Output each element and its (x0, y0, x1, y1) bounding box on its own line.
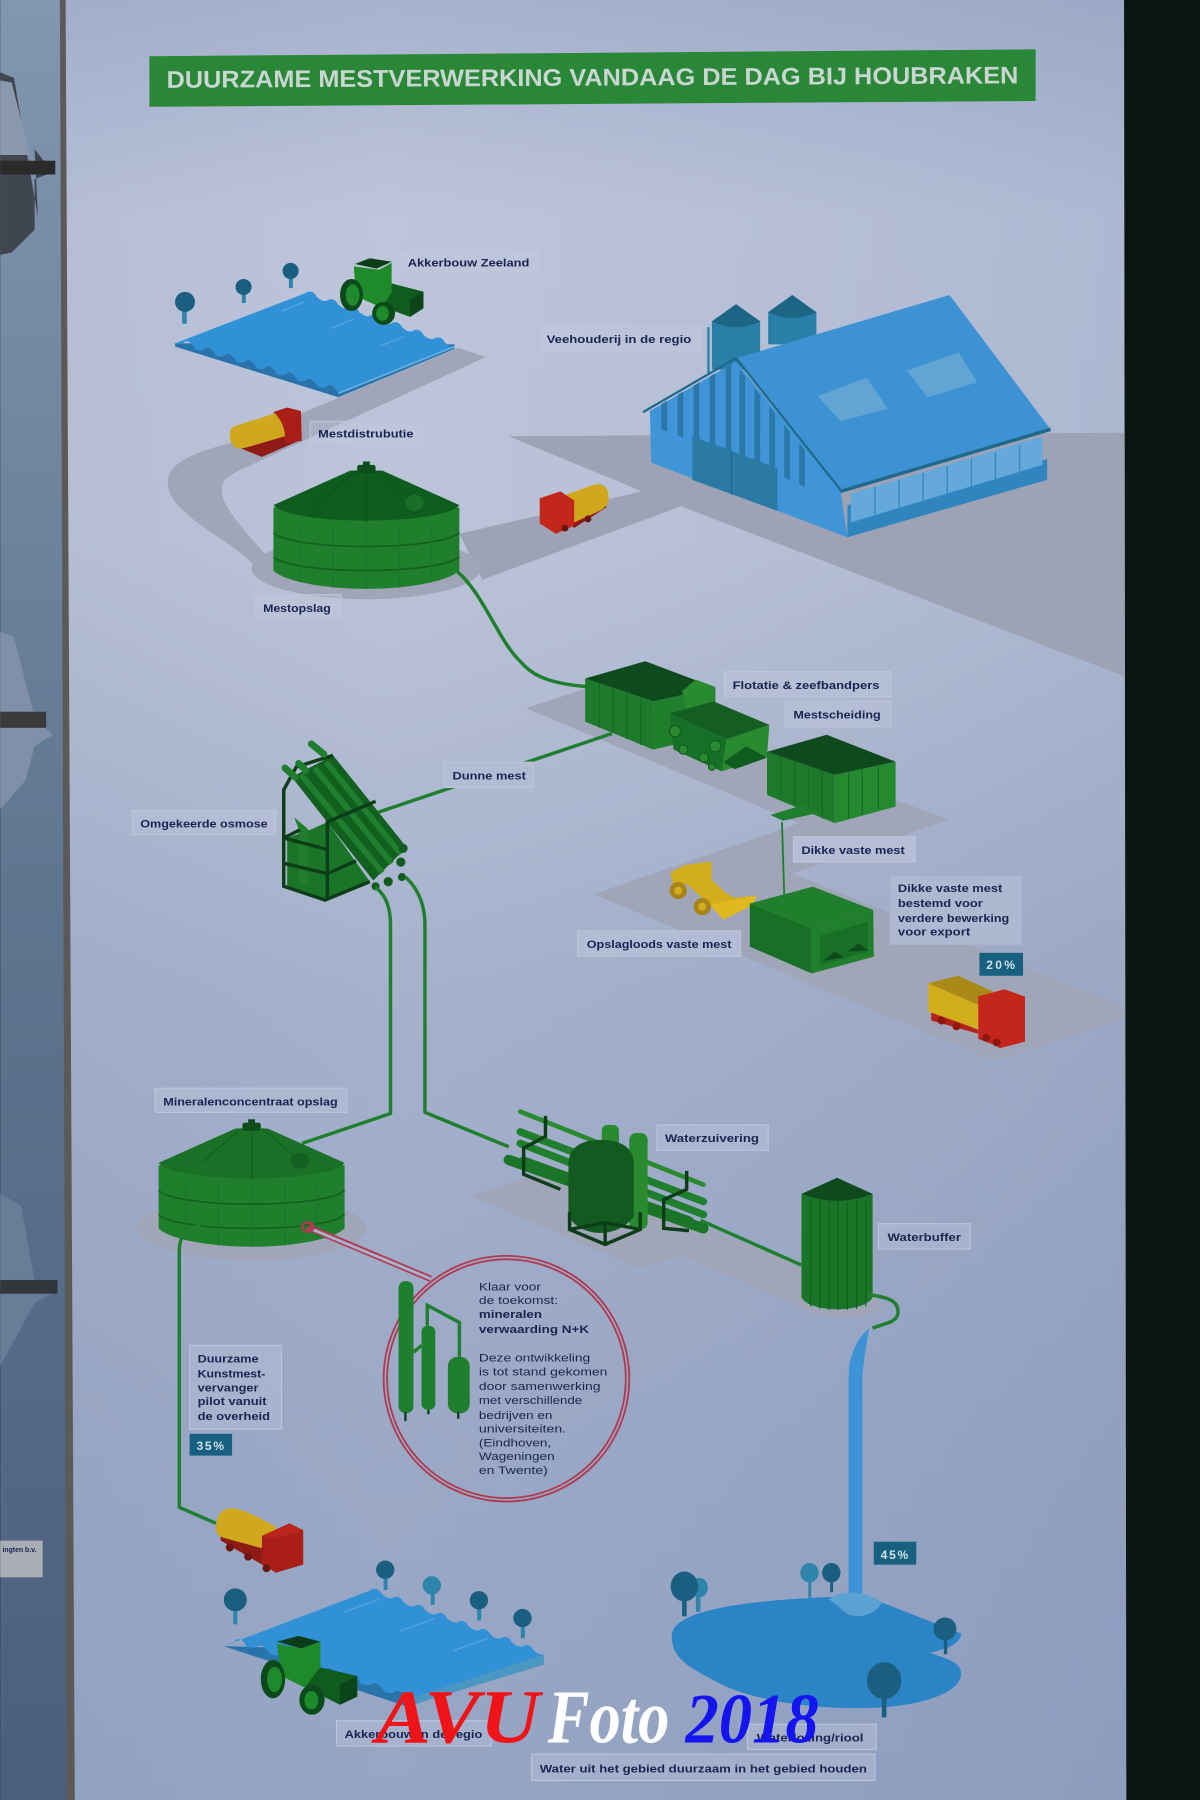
trees: pond (671, 1563, 956, 1717)
callout: minerals circle: Klaar voor (479, 1281, 541, 1293)
callout: minerals circle (384, 1256, 629, 1502)
trees: Zeeland (175, 263, 299, 324)
label: Dunne mest: Dunne mest (452, 770, 526, 782)
text: Duurzame Kunstmest-vervanger: Duurzame (198, 1354, 258, 1366)
pipe: purification to buffer (700, 1220, 801, 1265)
watermark: AVU Foto 2018 (371, 1676, 819, 1760)
text: export note: verdere bewerking (898, 913, 1009, 925)
pipe: buffer outlet (869, 1295, 898, 1328)
label: Water uit het gebied: Water uit het gebied duurzaam in het gebied houden (540, 1763, 867, 1775)
trees: regional field (224, 1561, 532, 1638)
icon: farm building (643, 295, 1051, 537)
icon: fertilizer tanker (216, 1508, 303, 1573)
label: Mestscheiding: Mestscheiding (793, 710, 881, 722)
label: Mestopslag: Mestopslag (263, 603, 331, 615)
watermark: AVU Foto 2018: AVU (371, 1676, 543, 1760)
title banner (149, 49, 1036, 107)
text: Duurzame Kunstmest-vervanger: vervanger (198, 1382, 259, 1394)
label: Mestdistrubutie: Mestdistrubutie (318, 428, 413, 440)
pipes: osmosis outputs (302, 877, 509, 1147)
pipe: tank to separator (456, 571, 586, 686)
small sign on frame (0, 1541, 43, 1577)
icon: tractor top (340, 258, 423, 325)
callout: minerals circle: Wageningen (479, 1451, 555, 1463)
icon: solids container (767, 735, 896, 823)
badge: 45%: 45% (881, 1548, 909, 1562)
label: Water uit het gebied (532, 1754, 875, 1780)
icon: storage tank Mestopslag (273, 461, 459, 589)
text: Duurzame Kunstmest-vervanger: pilot vanuit (198, 1396, 267, 1408)
icon: water buffer tower (801, 1178, 873, 1310)
callout: minerals circle: met verschillende (479, 1395, 582, 1407)
callout: minerals circle: universiteiten. (479, 1424, 566, 1436)
label: Mineralenconcentraat opslag (155, 1088, 347, 1112)
icon: yellow loader (670, 862, 757, 920)
pipe: tank to fertilizer tanker (179, 1225, 216, 1523)
icon: water purification (509, 1112, 703, 1244)
label: Waterbuffer (878, 1224, 970, 1249)
callout: minerals circle: bedrijven en (479, 1410, 552, 1422)
label: Akkerbouw in de regio (337, 1721, 492, 1746)
label: Dikke vaste mest: Dikke vaste mest (801, 845, 905, 857)
label: Veehouderij in de regio: Veehouderij in de regio (547, 334, 692, 346)
label: Waterzuivering (657, 1125, 768, 1150)
text: export note: voor export (898, 927, 971, 939)
text: export note: Dikke vaste mest (898, 883, 1003, 895)
icon: flotation container (585, 661, 715, 750)
watermark: AVU Foto 2018: Foto (547, 1676, 669, 1760)
icon: solid manure shed (750, 887, 874, 973)
callout: minerals circle: verwaarding N+K (479, 1324, 589, 1336)
title banner: DUURZAME MESTVERWERKING VANDAAG DE DAG BIJ HOUBRAKEN (167, 62, 1018, 94)
badge: 20% (979, 953, 1023, 976)
text: export note (890, 876, 1022, 945)
label: Opslagloods vaste mest: Opslagloods vaste mest (587, 939, 732, 951)
label: Flotatie & zeefbandpers: Flotatie & zeefbandpers (733, 680, 880, 692)
icon: reverse osmosis rack (284, 744, 408, 900)
background: left metal frame (0, 0, 76, 1800)
badge: 35% (190, 1434, 232, 1456)
callout: minerals circle: de toekomst: (479, 1295, 558, 1307)
label: Mineralenconcentraat opslag: Mineralenconcentraat opslag (163, 1096, 338, 1108)
label: Opslagloods vaste mest (578, 931, 741, 956)
road and ground shadows (137, 348, 1124, 1317)
label: Omgekeerde osmose (132, 810, 276, 835)
label: Akkerbouw Zeeland (400, 250, 539, 273)
water stream (849, 1328, 869, 1601)
label: Waterlozing/riool (748, 1724, 876, 1749)
watermark: AVU Foto 2018: 2018 (685, 1681, 819, 1759)
icon: tanker distribution (230, 408, 302, 457)
pipe: thin fraction to osmosis (373, 734, 612, 814)
label: Veehouderij in de regio (539, 326, 702, 351)
small sign on frame: ingten b.v. (2, 1547, 36, 1554)
pipe: solids to shed (782, 822, 784, 895)
badge: 20%: 20% (986, 958, 1015, 972)
icon: mineral concentrate tank (159, 1119, 345, 1247)
badge: 35%: 35% (196, 1439, 224, 1453)
label: Mestscheiding (785, 701, 891, 727)
callout: minerals circle: door samenwerking (479, 1381, 601, 1393)
text: Duurzame Kunstmest-vervanger: de overheid (198, 1411, 270, 1423)
label: Flotatie & zeefbandpers (725, 672, 891, 697)
field: Akkerbouw Zeeland (175, 292, 455, 397)
icon: distillation columns (399, 1281, 470, 1421)
callout: minerals circle: is tot stand gekomen (479, 1366, 607, 1378)
callout: minerals circle: en Twente) (479, 1465, 548, 1477)
label: Dikke vaste mest (793, 837, 915, 862)
icon: export truck (928, 976, 1025, 1048)
callout: minerals circle: Deze ontwikkeling (479, 1352, 590, 1364)
label: Waterlozing/riool: Waterlozing/riool (757, 1732, 863, 1744)
icon: tractor bottom (261, 1636, 357, 1715)
text: Duurzame Kunstmest-vervanger (190, 1345, 281, 1429)
label: Waterbuffer: Waterbuffer (888, 1232, 962, 1244)
label: Dunne mest (444, 762, 533, 788)
field: Akkerbouw in de regio (224, 1589, 544, 1706)
icon: tanker on road (540, 484, 609, 534)
callout: minerals circle: (Eindhoven, (479, 1437, 551, 1449)
label: Akkerbouw in de regio: Akkerbouw in de regio (345, 1729, 483, 1741)
callout: minerals circle: mineralen (479, 1309, 542, 1321)
callout leader line (302, 1223, 431, 1279)
icon: press machine (669, 701, 769, 771)
text: Duurzame Kunstmest-vervanger: Kunstmest- (198, 1369, 266, 1381)
badge: 45% (874, 1542, 916, 1565)
pond (672, 1593, 961, 1708)
label: Omgekeerde osmose: Omgekeerde osmose (140, 819, 268, 831)
label: Akkerbouw Zeeland: Akkerbouw Zeeland (408, 257, 529, 269)
label: Mestopslag (255, 595, 341, 619)
text: export note: bestemd voor (898, 898, 984, 910)
label: Mestdistrubutie (310, 421, 421, 444)
label: Waterzuivering: Waterzuivering (665, 1133, 759, 1145)
